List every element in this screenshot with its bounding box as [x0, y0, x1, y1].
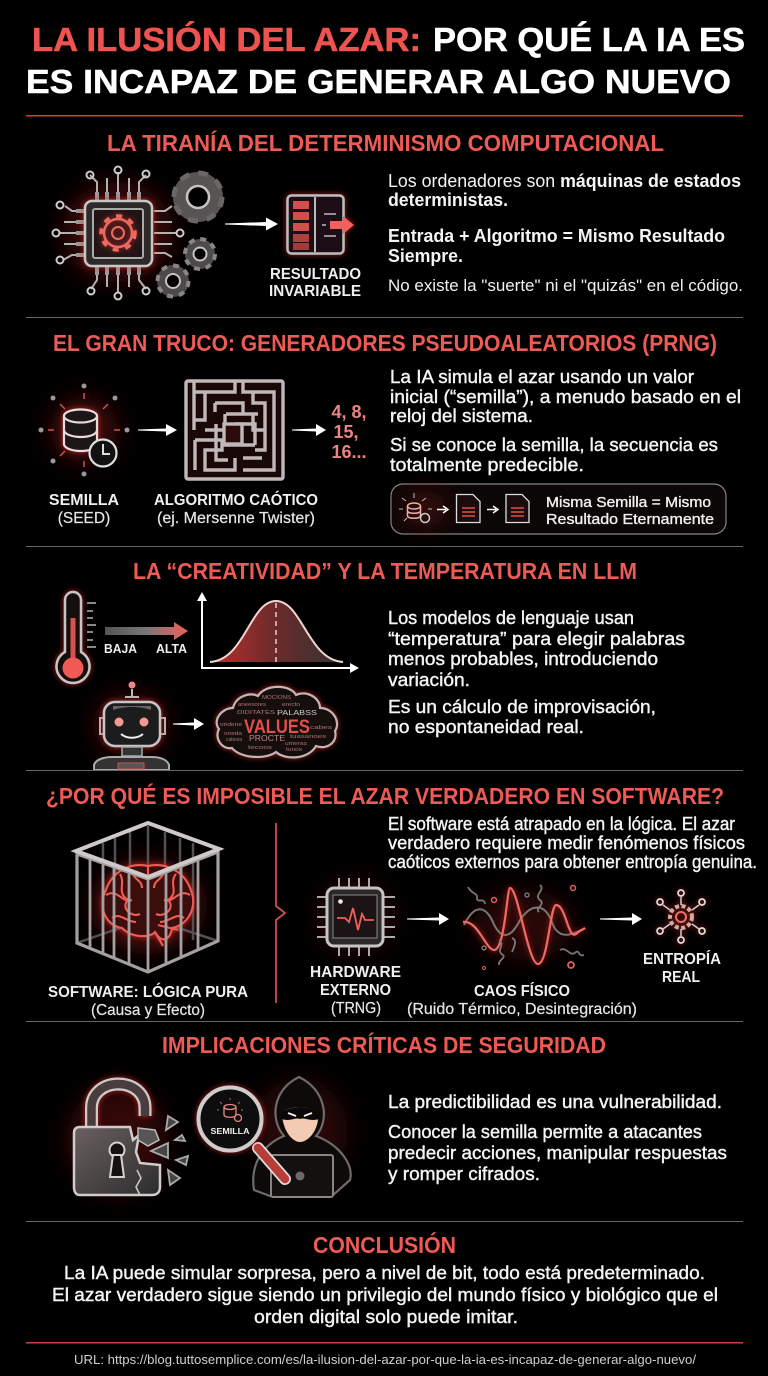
arrow: [292, 424, 326, 436]
label: algoritmo caótico: ALGORITMO CAÓTICO: [154, 490, 318, 509]
text block: La predictibilidad es una vulnerabilidad.: [388, 1092, 722, 1112]
title: [26, 21, 745, 101]
label: resultado invariable: INVARIABLE: [269, 283, 361, 300]
label: hardware: (TRNG): [331, 1000, 381, 1017]
text block: variación.: [388, 670, 470, 690]
label: semilla: [49, 492, 120, 527]
text block: reloj del sistema.: [390, 406, 533, 426]
text block: [388, 608, 685, 737]
text block: no espontaneidad real.: [388, 717, 584, 737]
icon: word cloud: cabeza: [226, 737, 243, 743]
text block: [388, 814, 757, 872]
heading: IMPLICACIONES CRÍTICAS DE SEGURIDAD: [162, 1031, 606, 1058]
divider: bracket: [276, 823, 285, 1003]
callout: Resultado Eternamente: [546, 512, 714, 528]
label: semilla: (SEED): [58, 510, 110, 527]
icon: robot: [93, 682, 169, 770]
random numbers: 4, 8,: [331, 402, 367, 422]
callout: Misma Semilla = Mismo: [546, 495, 711, 511]
icon: word cloud: MOCIONS: [262, 695, 291, 701]
title: LA ILUSIÓN DEL AZAR:: [32, 21, 421, 59]
icon: seed database and clock: [38, 384, 130, 476]
icon: word cloud: tunos: [286, 747, 302, 753]
text block: deterministas.: [388, 190, 508, 210]
label: caos físico: CAOS FÍSICO: [474, 981, 570, 1000]
text block: [390, 367, 741, 475]
text block: La IA puede simular sorpresa, pero a nivel de bit, todo está predeterminado.: [64, 1263, 705, 1283]
icon: chaotic waves: [463, 885, 585, 970]
icon: gears: [158, 173, 222, 296]
label: software: SOFTWARE: LÓGICA PURA: [48, 982, 248, 1001]
icon: word cloud: aneesores: [238, 702, 266, 708]
panel: temperatura: [56, 558, 685, 770]
text block: No existe la "suerte" ni el "quizás" en el código.: [388, 276, 743, 295]
icon: word cloud: erecto: [282, 702, 300, 708]
label: algoritmo caótico: (ej. Mersenne Twister): [157, 510, 315, 527]
text block: verdadero requiere medir fenómenos físicos: [388, 833, 745, 853]
label: algoritmo caótico: [154, 490, 318, 527]
icon: broken padlock: [67, 1084, 188, 1195]
arrow: baja to alta: ALTA: [156, 642, 187, 656]
text block: “temperatura” para elegir palabras: [388, 629, 685, 649]
icon: hooded hacker: [252, 1077, 351, 1197]
label: entropía real: REAL: [662, 969, 700, 986]
icon: magnifying glass with seed: SEMILLA: [210, 1126, 250, 1136]
arrow: baja to alta: [104, 622, 188, 656]
icon: word cloud: oneda: [224, 731, 243, 737]
label: entropía real: ENTROPÍA: [643, 949, 721, 968]
text block: [52, 1263, 718, 1327]
icon: word cloud: cabes: [310, 725, 332, 731]
label: resultado invariable: [269, 266, 361, 300]
chart: bell curve: [197, 592, 359, 673]
text block: Si se conoce la semilla, la secuencia es: [390, 435, 718, 455]
panel: determinismo: [52, 129, 743, 300]
icon: word cloud: PROCTE: [249, 734, 285, 743]
text block: El azar verdadero sigue siendo un privilegio del mundo físico y biológico que el: [52, 1285, 718, 1305]
brain: [103, 865, 193, 946]
text block: menos probables, introduciendo: [388, 649, 658, 669]
random numbers: [331, 402, 367, 462]
heading: LA TIRANÍA DEL DETERMINISMO COMPUTACIONAL: [107, 129, 664, 156]
icon: thermometer: [56, 592, 96, 683]
label: hardware: [310, 964, 401, 1017]
arrow: [138, 424, 177, 436]
icon: word cloud: PALABSS: [277, 710, 317, 717]
icon: magnifying glass with seed: [198, 1088, 285, 1179]
text block: inicial (“semilla”), a menudo basado en el: [390, 387, 741, 407]
label: semilla: SEMILLA: [49, 492, 120, 509]
arrow: [600, 913, 642, 925]
icon: word cloud: [217, 687, 337, 757]
title: ES INCAPAZ DE GENERAR ALGO NUEVO: [26, 64, 731, 101]
icon: hardware chip: [317, 878, 395, 956]
callout: [391, 484, 726, 534]
icon: word cloud: tuasanoes: [290, 734, 326, 740]
icon: word cloud: ondene: [220, 722, 242, 728]
panel: PRNG: [38, 330, 741, 534]
icon: caged brain: [76, 823, 219, 972]
label: software: [48, 982, 248, 1019]
text block: [388, 1092, 727, 1184]
text block: La IA simula el azar usando un valor: [390, 367, 694, 387]
text block: El software está atrapado en la lógica. El azar: [388, 814, 735, 834]
label: caos físico: (Ruido Térmico, Desintegración): [407, 1001, 637, 1018]
text block: orden digital solo puede imitar.: [254, 1307, 518, 1327]
label: entropía real: [643, 949, 721, 986]
icon: word cloud: VALUES: [244, 717, 310, 738]
icon: seed to documents: [399, 493, 529, 522]
random numbers: 15,: [333, 422, 359, 442]
text block: totalmente predecible.: [390, 455, 584, 475]
panel: conclusión: [52, 1231, 718, 1327]
label: software: (Causa y Efecto): [91, 1002, 205, 1019]
text block: y romper cifrados.: [388, 1164, 540, 1184]
arrow: [173, 718, 204, 730]
heading: CONCLUSIÓN: [313, 1231, 456, 1258]
text block: Conocer la semilla permite a atacantes: [388, 1122, 702, 1142]
icon: entropy: [657, 890, 705, 943]
label: resultado invariable: RESULTADO: [270, 266, 361, 283]
text block: predecir acciones, manipular respuestas: [388, 1143, 727, 1163]
arrow: [407, 913, 449, 925]
panel: azar verdadero: [46, 782, 757, 1019]
arrow: baja to alta: BAJA: [104, 642, 137, 656]
source url: URL: https://blog.tuttosemplice.com/es/la-ilusion-del-azar-por-que-la-ia-es-incapaz-de-generar-algo-nuevo/: [74, 1352, 696, 1367]
heading: LA “CREATIVIDAD” Y LA TEMPERATURA EN LLM: [133, 558, 637, 584]
random numbers: 16...: [331, 442, 367, 462]
text block: Es un cálculo de improvisación,: [388, 697, 656, 717]
text block: Los ordenadores son máquinas de estados: [388, 171, 741, 191]
title: POR QUÉ LA IA ES: [433, 21, 745, 59]
label: hardware: HARDWARE: [310, 964, 401, 981]
label: hardware: EXTERNO: [320, 982, 391, 999]
icon: maze: [186, 381, 283, 479]
text block: Los modelos de lenguaje usan: [388, 608, 634, 628]
icon: result document: [288, 196, 354, 254]
panel: seguridad: [67, 1031, 727, 1197]
icon: word cloud: umeras: [285, 741, 307, 747]
arrow: [225, 218, 278, 230]
text block: Entrada + Algoritmo = Mismo Resultado: [388, 226, 725, 246]
icon: word cloud: DIDITATES: [237, 710, 275, 716]
label: caos físico: [407, 981, 637, 1018]
icon: word cloud: tecoos: [248, 745, 272, 751]
text block: Siempre.: [388, 246, 463, 266]
icon: chip and gears: [52, 166, 222, 300]
text block: [388, 171, 743, 295]
